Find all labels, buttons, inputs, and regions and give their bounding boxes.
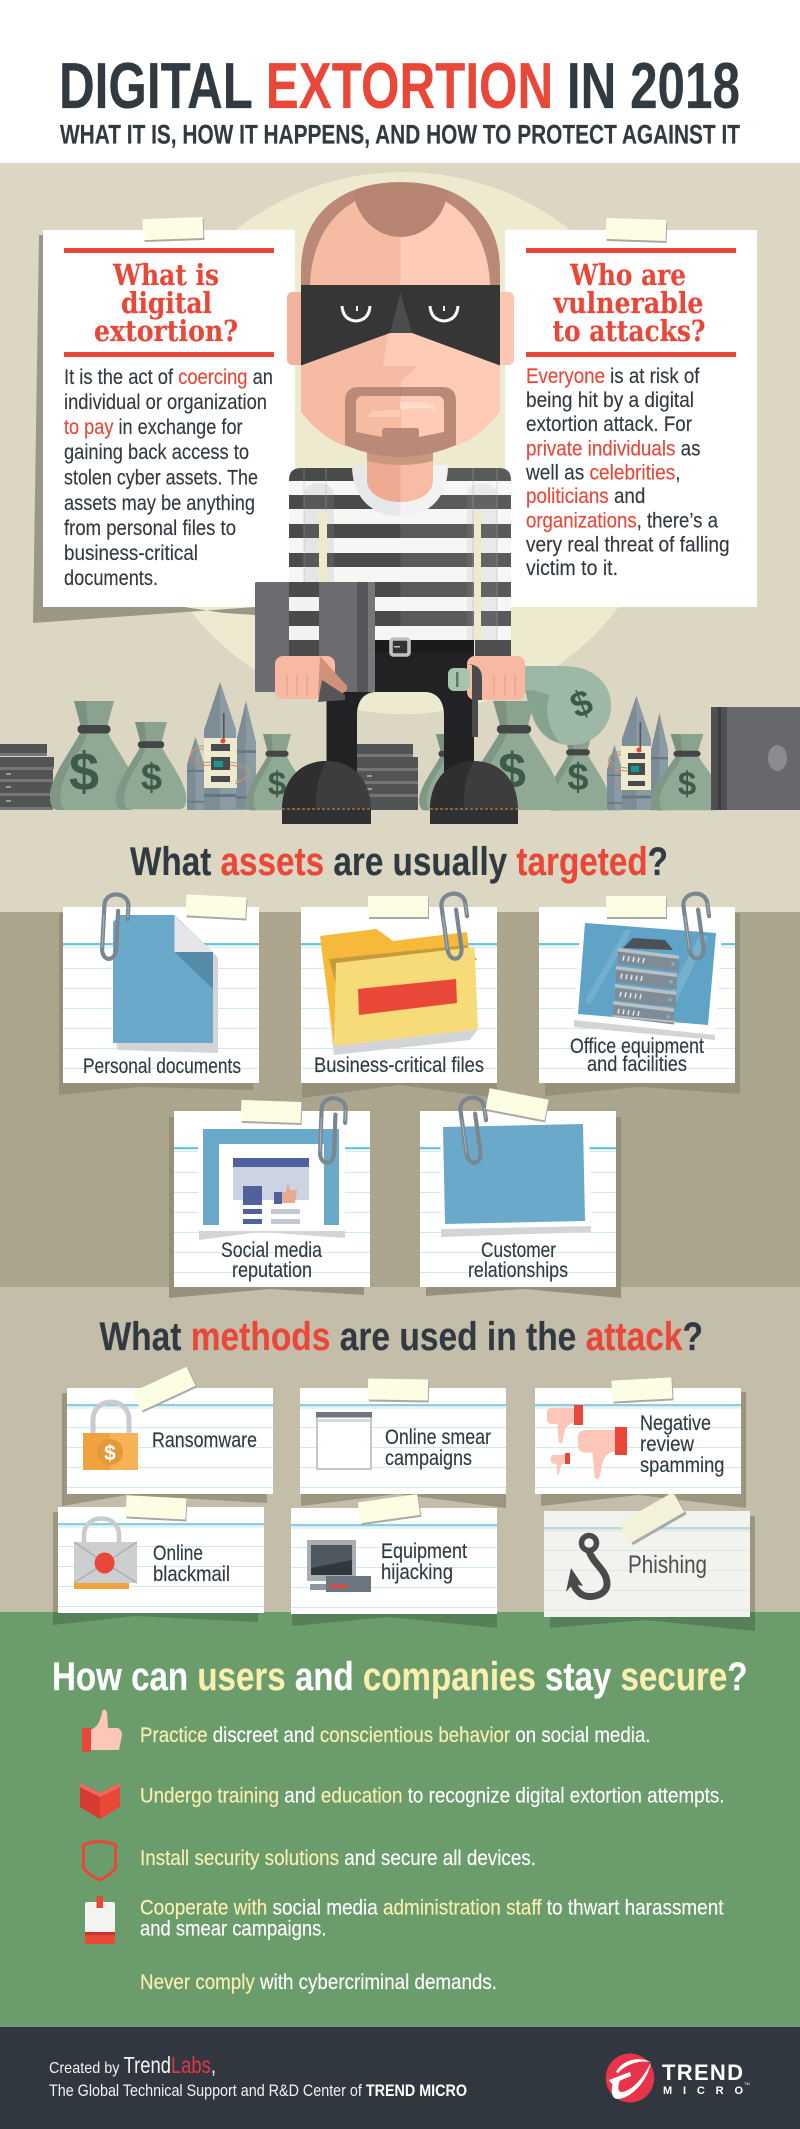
text block: definition: It is the act of coercing an [64,366,273,389]
label: office equipment: and facilities [587,1053,687,1076]
card: online smear campaigns [300,1388,506,1508]
logo: trend micro: TM [744,2081,750,2086]
text block: definition: business-critical [64,542,198,565]
card: customer relationships [420,1111,621,1298]
background: methods section [0,1287,800,1612]
footer credit: TrendLabs, [124,2052,216,2078]
thief: left sleeve [289,582,319,657]
background: security section [0,1612,800,2027]
scenery: money bag 4 [419,734,481,810]
icon: computer [307,1540,371,1592]
paperclip: card 3 [682,892,715,960]
thief: hanging money bag: $ [564,681,598,726]
label: online smear campaigns: campaigns [385,1447,472,1470]
label: business-critical files: Business-critical files [314,1054,484,1077]
scenery: right missiles and bomb panel [607,696,668,810]
text: cooperate [140,1897,724,1941]
list item: discreet behaviour [82,1710,650,1752]
label: ransomware: Ransomware [152,1429,257,1452]
scenery: left servers [0,744,54,810]
text block: vulnerable groups: Everyone is at risk of [526,365,700,388]
thief: hair [301,182,500,290]
card: negative review spamming [535,1388,746,1508]
heading: assets: What assets are usually targeted? [130,840,668,884]
icon: padlock: $ [104,1442,116,1465]
heading: what is digital extortion: extortion? [94,314,238,348]
list item: training [80,1783,724,1819]
icon: shield [84,1842,116,1880]
panel: what is digital extortion [33,230,295,623]
text block: definition: gaining back access to [64,441,249,464]
label: customer relationships: Customer [481,1239,556,1262]
heading: who are vulnerable [552,258,706,348]
label: social media reputation: Social media [221,1239,322,1262]
card: online blackmail [53,1507,264,1625]
scenery: money bag 3 [246,734,308,810]
label: customer relationships: relationships [468,1259,568,1282]
text block: vulnerable groups: very real threat of falling [526,534,730,556]
icon: book [80,1783,120,1819]
thief: briefcase [255,582,375,692]
logo: trend micro: TREND [662,2060,743,2085]
thief: forehead [310,190,490,290]
card: personal documents [59,907,259,1095]
text block: definition: stolen cyber assets. The [64,466,258,490]
text: cooperate: and smear campaigns. [140,1918,326,1941]
tape: left panel [143,217,204,242]
heading: who are vulnerable: vulnerable [553,286,704,320]
thief: neck [367,450,433,502]
title: DIGITAL EXTORTION IN 2018 [59,49,740,122]
thief: right shoe [430,761,518,824]
label: equipment hijacking [381,1540,467,1584]
text block: definition: individual or organization [64,391,267,414]
label: office equipment [570,1035,704,1076]
tape: right panel [606,218,667,243]
label: equipment hijacking: hijacking [381,1561,453,1584]
thief: trousers [326,645,474,772]
backdrop circle [132,172,674,714]
icon: server photo [574,920,722,1040]
label: online smear campaigns [385,1426,491,1470]
footer credit [49,2052,467,2100]
heading: what is digital extortion: What is [112,258,219,292]
icon: customer photo [440,1120,591,1237]
text block: definition [64,366,273,590]
card: social media reputation [169,1111,370,1298]
icon: badge [85,1896,115,1944]
scenery: money bag 2: $ [141,757,162,799]
illustration: thief [255,182,611,824]
thief: hanging money bag [525,666,611,745]
scenery: money bag 1: $ [69,742,99,802]
thief: left shoe [282,761,371,824]
thief: belt and buckle [375,639,475,655]
heading: what is digital extortion [94,258,238,348]
icon: locked envelope [74,1518,137,1589]
thief: right sleeve end [475,640,511,657]
label: customer relationships [468,1239,568,1282]
thief: mask nose shade [390,293,412,333]
label: phishing: Phishing [628,1551,707,1579]
tape: card 3 [606,896,667,919]
thief: straps [319,510,481,659]
list item: cooperate [85,1896,724,1944]
heading: methods: What methods are used in the attack? [100,1315,703,1359]
scenery: money bag 2 [116,722,186,809]
text: practice: Practice discreet and conscientious behavior on social media. [140,1724,650,1747]
label: online blackmail: blackmail [153,1563,230,1586]
tape: card 1 [185,894,248,921]
tape: card 4 [241,1100,302,1125]
text block: vulnerable groups: being hit by a digital [526,389,694,412]
thief: eyes [342,306,458,321]
icon: social media page [198,1125,345,1240]
label: equipment hijacking: Equipment [381,1540,467,1563]
text block: definition: to pay in exchange for [64,416,243,439]
thief: goatee [345,387,456,457]
text block: vulnerable groups: private individuals as [526,438,700,460]
footer credit: The Global Technical Support and R&D Center of TREND MICRO [49,2081,467,2100]
thief: left fist [275,656,347,702]
scenery: money bag 6: $ [567,757,589,799]
label: social media reputation: reputation [232,1259,312,1282]
text block: vulnerable groups: organizations, there’s a [526,509,718,532]
thief: right fist [467,656,525,700]
paperclip: card 1 [102,894,129,960]
scenery: money bag 7: $ [678,765,696,802]
background: assets section [0,912,800,1287]
logo: trend micro: MICRO [663,2085,743,2097]
scenery: money bag 5 [468,701,560,810]
tape: ransomware [132,1366,197,1413]
background: hero and assets heading [0,163,800,912]
text block: definition: from personal files to [64,517,236,540]
thief: collar [352,465,448,516]
icon: folder [320,929,478,1055]
paperclip: card 4 [320,1098,346,1163]
thief: striped shirt [289,468,511,640]
card: business-critical files [301,907,497,1098]
scenery: money bag 3: $ [268,765,286,802]
tape: phishing [619,1492,687,1546]
card: office equipment [539,907,740,1096]
icon: document [113,915,218,1053]
label: online blackmail: Online [153,1542,203,1565]
label: social media reputation [221,1239,322,1282]
heading: stay secure: How can users and companies stay secure? [52,1655,748,1699]
text: undergo: Undergo training and education to recognize digital extortion attempts. [140,1785,724,1808]
scenery: safe [711,707,800,810]
tape: online smear [368,1378,429,1403]
label: negative review spamming: spamming [640,1454,724,1477]
text block: vulnerable groups [525,365,730,580]
label: negative review spamming [640,1412,724,1477]
scenery: money bag 1 [50,701,138,810]
heading: who are vulnerable: to attacks? [552,314,706,348]
text block: definition: assets may be anything [64,492,255,515]
footer credit: Created by [49,2060,119,2077]
background: footer [0,2027,800,2129]
card: phishing [544,1511,755,1631]
thief: ears [287,292,514,365]
text block: definition: documents. [64,567,158,590]
text block: vulnerable groups: extortion attack. For [526,413,692,436]
text: cooperate: Cooperate with social media administration staff to thwart harassment [140,1897,724,1920]
text block: vulnerable groups: well as celebrities, [525,462,681,484]
thief: bald patch hairline [353,183,448,237]
text block: vulnerable groups: politicians and [526,485,645,508]
list item: security solutions [84,1842,536,1880]
text: install: Install security solutions and secure all devices. [140,1847,536,1870]
tape: equipment hijacking [358,1494,421,1525]
label: personal documents: Personal documents [83,1055,241,1078]
paperclip: card 2 [440,892,473,960]
panel: who are vulnerable [505,230,757,607]
tape: negative review [611,1377,674,1404]
tape: card 2 [368,896,429,919]
heading: who are vulnerable: Who are [569,258,686,292]
text: never comply: Never comply with cybercriminal demands. [140,1971,497,1994]
scenery: left missiles and bomb panel [187,682,256,810]
label: negative review spamming: review [640,1433,695,1456]
scenery: centre servers [357,744,418,810]
scenery: money bag 7 [651,734,723,810]
server rack [613,938,679,1024]
logo: trend micro [606,2054,750,2102]
thief: bag strap [448,664,482,737]
icon: thumbs down [547,1405,627,1479]
scenery: money bag 6 [546,732,610,810]
card: ransomware [62,1388,273,1506]
icon: fish hook [566,1536,607,1597]
label: online blackmail [153,1542,230,1586]
label: negative review spamming: Negative [640,1412,711,1435]
label: online smear campaigns: Online smear [385,1426,491,1449]
paperclip: card 5 [459,1096,492,1164]
icon: padlock [83,1402,138,1470]
label: office equipment: Office equipment [570,1035,704,1058]
heading: what is digital extortion: digital [121,286,212,320]
thief: black mask [301,285,500,366]
icon: thumb up [82,1710,122,1752]
icon: browser window [316,1412,372,1469]
tape: card 5 [485,1088,550,1123]
background: header [0,0,800,163]
text block: vulnerable groups: victim to it. [526,557,618,580]
scenery: money bag 5: $ [498,743,526,799]
thief: lower face [301,330,500,446]
tape: online blackmail [125,1495,188,1522]
card: equipment hijacking [291,1508,497,1628]
